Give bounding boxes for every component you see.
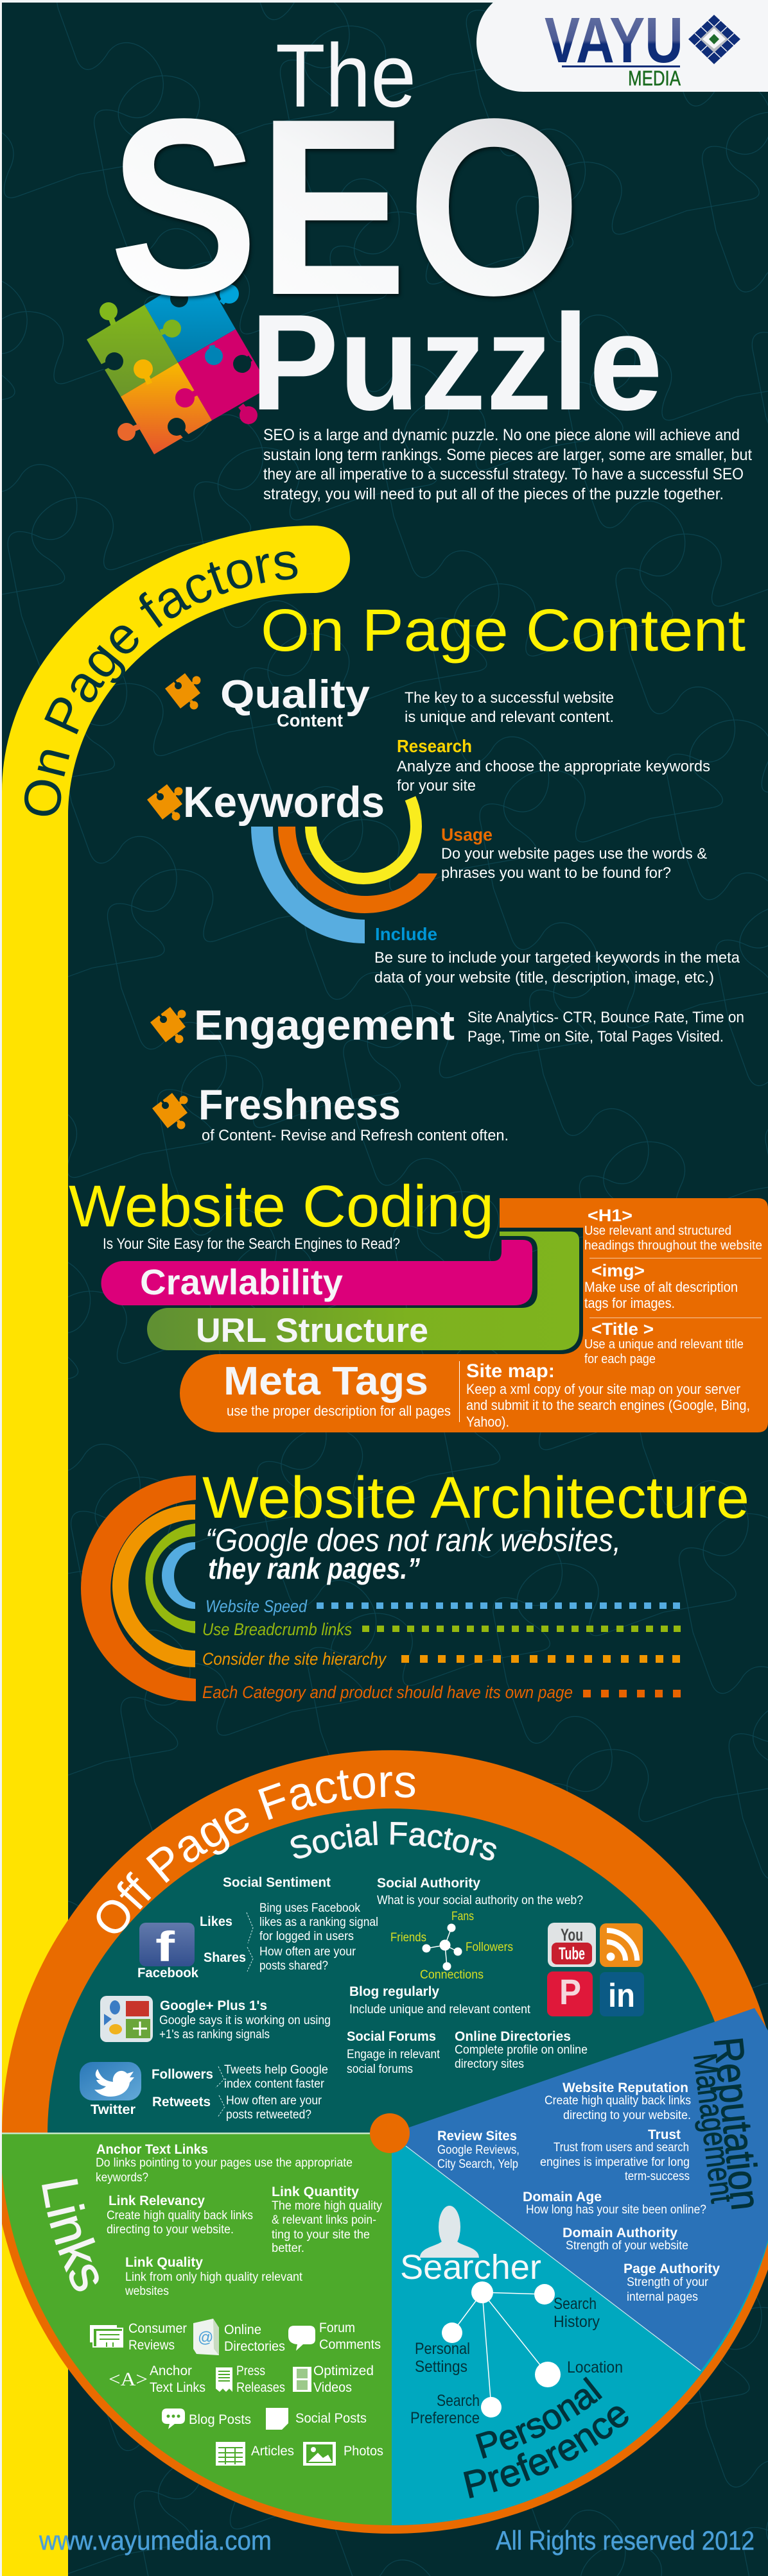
icon: blog bubble [162,2409,185,2429]
tag tips: headings throughout the website [584,1239,762,1253]
links content: Releases [236,2380,285,2395]
item: quality content: Quality [220,673,371,717]
social factors content [80,1875,644,2122]
social factors content: Followers [152,2067,213,2082]
icon: social post [266,2408,288,2430]
links content [42,2142,383,2466]
social factors content: Social Forums [347,2029,436,2044]
item: keywords [147,736,740,986]
social factors content: Google+ Plus 1's [160,1998,267,2013]
architecture quote [205,1522,621,1585]
searcher content: Search [554,2295,597,2313]
icon: youtube: Tube [559,1944,585,1963]
links content: directing to your website. [107,2223,234,2237]
orange meta tags shape [180,1198,768,1432]
links content: Videos [313,2380,352,2395]
item: keywords: Research [397,736,472,756]
links content: Social Posts [295,2411,367,2426]
social factors content: posts retweeted? [226,2108,311,2122]
green url structure shape [147,1232,579,1350]
intro paragraph [263,426,752,503]
orange piece [118,359,212,454]
node diagram [442,2281,561,2417]
icon: twitter [80,2062,141,2100]
item: keywords: Be sure to include your targeted keywords in the meta [374,949,740,966]
coding stack: Keep a xml copy of your site map on your server [466,1381,740,1397]
title: SEO [109,67,581,348]
network diagram: Connections [420,1968,484,1982]
item: keywords: Usage [441,825,493,845]
social factors content: Social Sentiment [223,1875,331,1890]
searcher content [400,2206,629,2498]
reputation management content: internal pages [627,2290,698,2304]
links content: Anchor Text Links [96,2142,208,2157]
title: Puzzle [250,286,663,439]
icon: youtube [548,1923,596,1967]
links content: keywords? [96,2171,148,2185]
social factors content: posts shared? [259,1959,328,1973]
panel: reputation management [406,2008,768,2371]
links content: Text Links [150,2380,205,2395]
links label: Links [42,2179,99,2291]
links content: Do links pointing to your pages use the appropriate [96,2156,353,2170]
architecture list: Consider the site hierarchy [202,1649,387,1669]
social factors content: Online Directories [455,2029,571,2044]
social factors content: Blog regularly [349,1984,439,1999]
item: keywords: for your site [397,777,476,794]
icon: pinterest [547,1971,593,2016]
tag tips [584,1206,762,1366]
reputation management content [437,2035,768,2304]
title [109,25,663,439]
links content: Articles [251,2444,294,2459]
icon: person [420,2206,479,2258]
reputation management content: engines is imperative for long [540,2156,690,2169]
links content: Online [224,2323,261,2337]
social factors content: What is your social authority on the web? [377,1894,583,1907]
searcher content: Search [437,2392,480,2410]
heading: website architecture: Website Architecture [202,1465,749,1531]
icon: online directories: @ [198,2329,213,2346]
social factors content: Shares [204,1950,246,1965]
social factors content: Twitter [91,2102,135,2117]
keyword arcs [251,798,437,943]
icon: facebook [139,1923,195,1970]
links content: Link Quantity [272,2185,359,2199]
network diagram: Followers [466,1941,513,1954]
management label: Management [686,2051,741,2205]
links content: Create high quality back links [107,2209,253,2222]
item: engagement: Site Analytics- CTR, Bounce Rate, Time on [467,1009,744,1026]
reputation management content: Domain Authority [563,2226,677,2240]
links content: Anchor [150,2364,192,2378]
coding stack [101,1198,768,1432]
logo panel [476,0,768,92]
centre marker [370,2113,410,2153]
links content: Link from only high quality relevant [125,2271,303,2284]
reputation management content: directing to your website. [563,2109,691,2122]
links content: Reviews [128,2338,175,2353]
reputation management content: Trust [648,2127,681,2142]
icon: linkedin [600,1972,644,2016]
item: freshness: of Content- Revise and Refresh content often. [202,1127,509,1144]
icon: puzzle piece [147,784,182,820]
item: quality content: Content [277,710,343,730]
searcher content: Preference [464,2407,629,2498]
tag tips: Use relevant and structured [584,1224,731,1238]
network diagram: Fans [451,1910,474,1923]
tag tips: <H1> [588,1206,633,1225]
icon: consumer reviews [90,2325,123,2347]
puzzle icon [87,270,260,454]
tag tips: Make use of alt description [584,1279,738,1295]
item: keywords: phrases you want to be found for? [441,864,671,882]
coding stack: use the proper description for all pages [227,1403,451,1419]
links content: Blog Posts [189,2412,251,2427]
item: freshness [152,1081,509,1144]
item: keywords: data of your website (title, description, image, etc.) [374,969,714,986]
icon: pinterest: P [559,1971,581,2012]
social factors content: directory sites [455,2057,524,2071]
icon: puzzle piece [165,673,200,710]
architecture list [202,1597,681,1702]
dots: green [362,1626,681,1632]
social factors content: How often are your [259,1945,356,1959]
heading: on page content: On Page Content [261,597,746,664]
reputation management content: Review Sites [437,2129,517,2143]
social factors content: Tweets help Google [224,2063,328,2077]
links content: Optimized [313,2364,374,2378]
icon: linkedin: in [608,1977,635,2014]
social factors content: for logged in users [259,1930,354,1943]
item: quality content: is unique and relevant content. [405,708,614,726]
band label: On Page factors [24,551,298,816]
links content: Comments [319,2337,381,2352]
footer [39,2525,755,2555]
item: keywords: Keywords [183,778,385,827]
item: engagement: Page, Time on Site, Total Pages Visited. [467,1028,724,1045]
reputation management content: Page Authority [624,2262,720,2276]
coding stack: URL Structure [196,1312,428,1350]
reputation management content: City Search, Yelp [437,2158,518,2171]
off page factors circle [0,1750,768,2534]
social factors content: likes as a ranking signal [259,1916,378,1929]
icon: youtube: You [561,1925,583,1945]
links content: websites [125,2285,169,2298]
reputation management content: Google Reviews, [437,2143,519,2157]
logo wordmark: VAYU [545,4,683,76]
icon: puzzle piece [150,1007,186,1043]
coding stack: Yahoo). [466,1414,509,1430]
magenta crawlability shape [101,1240,532,1305]
architecture list: Website Speed [205,1597,308,1616]
social factors content: Likes [200,1914,232,1929]
dots: orange [583,1690,681,1697]
panel: personal preference [392,2134,768,2525]
architecture list: Each Category and product should have its own page [202,1683,573,1702]
icon: forum bubble [288,2326,315,2351]
social factors content: Social Authority [377,1876,480,1891]
icon: anchor tag: <A> [109,2369,148,2390]
intro paragraph: SEO is a large and dynamic puzzle. No one piece alone will achieve and [263,426,740,444]
reputation management content: Strength of your [627,2276,709,2289]
item: freshness: Freshness [198,1081,401,1128]
reputation management content: Create high quality back links [545,2094,691,2108]
social factors content: Engage in relevant [347,2048,441,2061]
item: engagement [150,1001,744,1049]
heading: website coding: Is Your Site Easy for the Search Engines to Read? [103,1235,400,1253]
social factors content: Include unique and relevant content [349,2003,531,2016]
links content: & relevant links poin- [272,2213,376,2227]
architecture quote: they rank pages.” [208,1552,420,1585]
reputation management content: Trust from users and search [554,2141,689,2154]
item: keywords: Include [375,924,437,944]
reputation management content: Domain Age [523,2190,602,2204]
links content: Forum [319,2321,355,2335]
reputation management content: Website Reputation [563,2081,688,2095]
network diagram [390,1910,513,1982]
searcher content: Settings [415,2358,467,2376]
green piece [87,302,181,397]
heading: website coding: Website Coding [69,1174,494,1239]
links content: Link Quality [125,2255,203,2270]
reputation management content: How long has your site been online? [526,2203,706,2217]
icon: puzzle piece [152,1093,188,1129]
social factors content: Retweets [152,2095,211,2109]
icon: rss [600,1923,643,1967]
architecture quote: “Google does not rank websites, [205,1522,621,1558]
icon: online directories [193,2319,219,2355]
social factors content: Google says it is working on using [159,2014,331,2027]
icon: photos [303,2442,336,2466]
architecture arcs [81,1475,196,1701]
architecture list: Use Breadcrumb links [202,1620,352,1639]
social factors content: social forums [347,2063,413,2076]
social factors content: Facebook [137,1966,198,1980]
pink piece [178,329,260,424]
item: quality content [165,673,614,730]
social factors content: How often are your [226,2094,322,2108]
reputation management content: Strength of your website [566,2239,688,2253]
links content: Press [236,2364,265,2378]
searcher content: Personal [415,2340,470,2358]
tag tips: tags for images. [584,1295,675,1311]
panel: links [0,2134,392,2525]
coding stack: Crawlability [140,1262,343,1302]
social factors content: Bing uses Facebook [259,1902,360,1915]
panel: social factors [48,1808,736,2134]
logo diamond [688,15,740,64]
personal preference label: Personal [475,2376,602,2459]
searcher content: Location [567,2358,623,2376]
dots: amber [401,1655,680,1663]
tag tips: for each page [584,1352,656,1366]
icon: google plus [100,1996,153,2042]
icon: video [293,2367,311,2392]
footer: www.vayumedia.com [39,2525,272,2555]
reputation management content: term-success [625,2170,690,2183]
links content: Photos [344,2444,383,2459]
title: The [275,25,416,126]
item: engagement: Engagement [194,1001,455,1049]
social factors content: Complete profile on online [455,2043,588,2057]
item: keywords: Do your website pages use the words & [441,845,707,863]
searcher content: Searcher [400,2248,541,2287]
tag tips: Use a unique and relevant title [584,1337,744,1352]
icon: articles [216,2442,245,2466]
links content: Consumer [128,2321,187,2336]
intro paragraph: strategy, you will need to put all of the pieces of the puzzle together. [263,485,724,503]
links content: The more high quality [272,2199,382,2213]
links content: Link Relevancy [109,2194,205,2208]
social factors content: +1's as ranking signals [159,2028,270,2041]
tag tips: <Title > [591,1319,654,1339]
searcher content: History [554,2313,600,2331]
icon: press release [216,2367,232,2392]
item: keywords: Analyze and choose the appropriate keywords [397,758,710,775]
coding stack: Meta Tags [223,1359,428,1404]
dots: blue [317,1602,680,1609]
coding stack: Site map: [466,1361,555,1382]
tag tips: <img> [591,1261,645,1280]
off page factors label: Off Page Factors [96,1770,415,1933]
social factors content: index content faster [224,2077,325,2091]
links content: ting to your site the [272,2228,370,2242]
network diagram: Friends [390,1931,426,1945]
searcher content: Preference [410,2409,480,2427]
links content: Directories [224,2339,285,2354]
blue piece [144,270,239,363]
social factors label: Social Factors [290,1821,496,1860]
item: quality content: The key to a successful website [405,689,614,707]
icon: facebook: f [155,1923,175,1970]
links content: better. [272,2242,304,2255]
logo sub wordmark: MEDIA [628,67,681,90]
